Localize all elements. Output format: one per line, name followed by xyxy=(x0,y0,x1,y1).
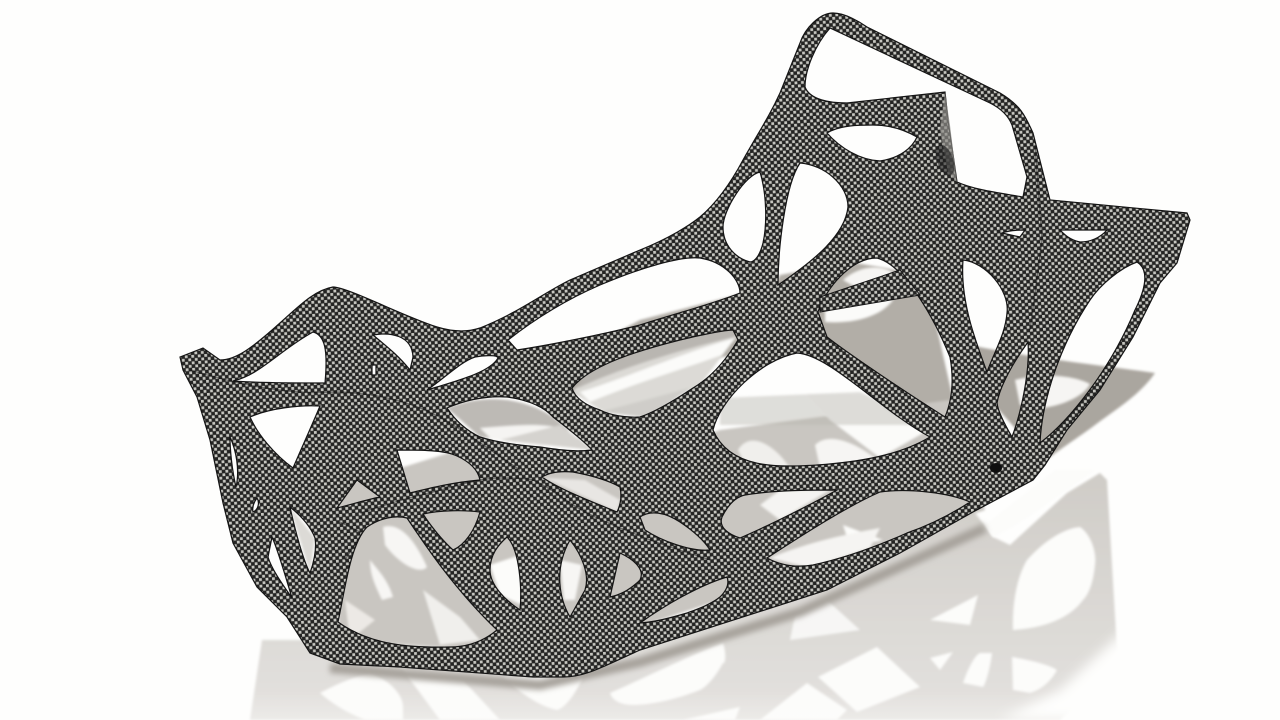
cast shadow on floor xyxy=(290,262,1155,650)
white stripe above right reflection xyxy=(985,470,1095,537)
tube edge lines xyxy=(190,145,1042,560)
dark knot on lower right rail xyxy=(990,463,1002,473)
soft shadow behind upper frame xyxy=(500,262,960,430)
rear strut behind the large opening xyxy=(820,270,920,312)
shadow band on the right xyxy=(970,345,1155,470)
floor reflection xyxy=(243,470,1143,720)
opening between upper ribs xyxy=(572,335,738,417)
right and lower fade of the reflection xyxy=(1000,630,1135,720)
dark recess at top right xyxy=(932,142,958,178)
floor inside lower openings xyxy=(330,400,985,650)
light gap in shadow loop xyxy=(1015,376,1090,408)
carbon fibre body xyxy=(180,13,1190,677)
shadow along lower edge of body xyxy=(330,528,985,685)
opening below second rib xyxy=(447,399,592,450)
reflection highlights xyxy=(320,527,1095,720)
highlights inside openings xyxy=(290,267,930,645)
silver side of the rear spire xyxy=(940,92,957,182)
